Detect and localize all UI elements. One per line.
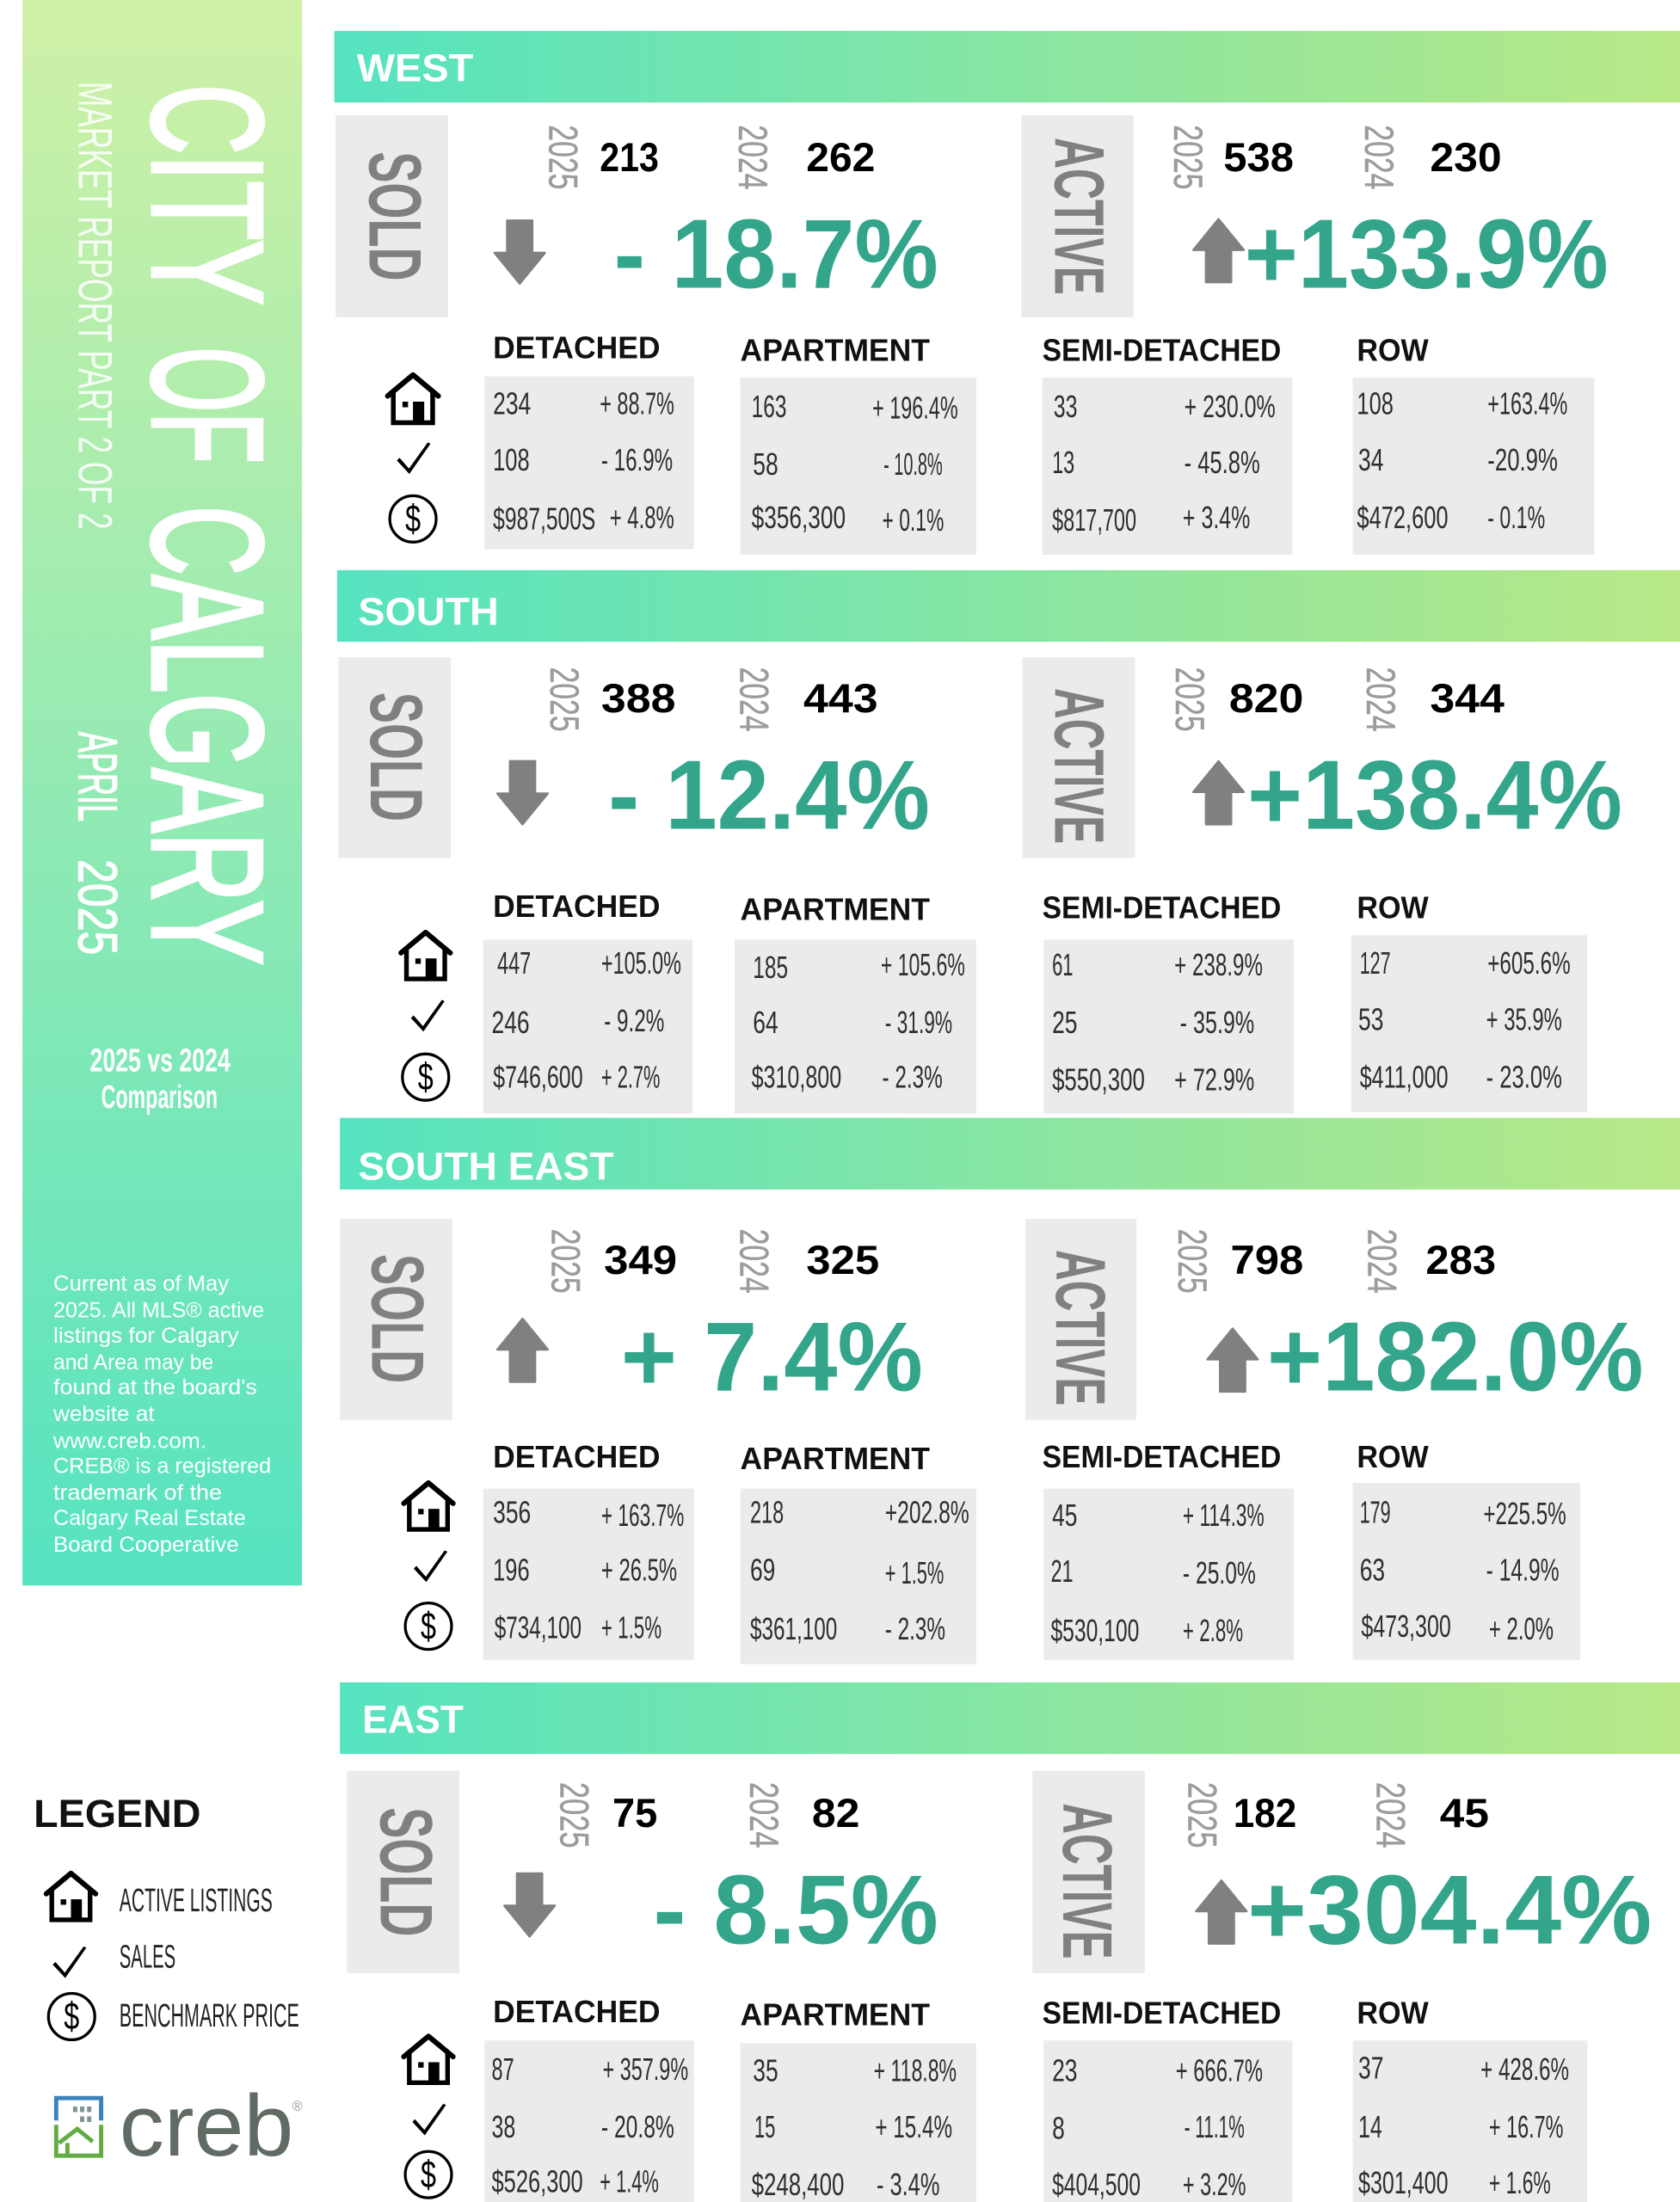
active card — [1032, 1771, 1145, 1973]
table: semi-detached: + 666.7% — [1176, 2053, 1263, 2088]
disclaimer text: CREB® is a registered — [53, 1455, 271, 1479]
sold card — [335, 115, 448, 317]
active card: ACTIVE — [1041, 1250, 1119, 1405]
legend heading: LEGEND — [34, 1792, 201, 1836]
active counts: 182 — [1234, 1791, 1296, 1836]
sold counts: 2025 — [541, 667, 587, 732]
table: semi-detached: SEMI-DETACHED — [1043, 890, 1281, 926]
table: detached — [484, 1994, 694, 2202]
table: detached: 234 — [493, 386, 531, 421]
table: row: - 0.1% — [1487, 500, 1545, 535]
table: detached: - 16.9% — [601, 442, 673, 477]
active card: ACTIVE — [1048, 1803, 1126, 1959]
table: semi-detached: + 114.3% — [1183, 1498, 1265, 1533]
sold change: + 7.4% — [621, 1302, 923, 1412]
table: detached: 356 — [493, 1495, 531, 1530]
table: semi-detached: - 45.8% — [1185, 445, 1260, 480]
table: row — [1353, 333, 1594, 555]
table: detached: DETACHED — [493, 889, 660, 924]
table: detached: $746,600 — [493, 1059, 583, 1094]
table: row: + 1.6% — [1489, 2165, 1551, 2200]
table: semi-detached: 23 — [1052, 2053, 1077, 2088]
logo: creb — [56, 2077, 303, 2174]
table: apartment: + 0.1% — [882, 502, 944, 538]
sold counts: 262 — [806, 135, 875, 181]
arrow: sold down — [497, 761, 548, 824]
table: row: 179 — [1360, 1495, 1391, 1530]
sold change: - 12.4% — [608, 741, 930, 850]
table: apartment: 64 — [753, 1005, 778, 1040]
table: apartment: 35 — [753, 2053, 778, 2088]
table: apartment: APARTMENT — [741, 1441, 930, 1476]
table: row — [1353, 1439, 1580, 1660]
table: row: -20.9% — [1487, 442, 1558, 477]
sold card: SOLD — [354, 692, 437, 821]
table: row: 127 — [1360, 945, 1391, 981]
table: apartment: + 15.4% — [875, 2109, 952, 2144]
comparison label: Comparison — [102, 1079, 218, 1115]
heading bar — [337, 570, 1680, 642]
sold card: SOLD — [353, 151, 435, 281]
heading bar — [340, 1118, 1680, 1190]
disclaimer text: Board Cooperative — [53, 1533, 239, 1557]
table: semi-detached: + 3.2% — [1183, 2167, 1246, 2202]
table: row: + 2.0% — [1489, 1611, 1554, 1646]
table: row: ROW — [1357, 1996, 1429, 2031]
comparison label: 2025 vs 2024 — [90, 1043, 231, 1079]
table: detached: + 357.9% — [603, 2051, 688, 2087]
table: detached: 38 — [492, 2109, 515, 2144]
active counts: 2024 — [1367, 1782, 1412, 1848]
table: semi-detached — [1043, 333, 1292, 555]
table: apartment — [735, 891, 976, 1114]
table: detached: - 9.2% — [604, 1003, 664, 1038]
table: detached: 246 — [492, 1005, 530, 1040]
legend label: benchmark price: BENCHMARK PRICE — [120, 1997, 299, 2033]
active counts — [1169, 1229, 1496, 1294]
title: CITY — [120, 84, 296, 304]
active counts: 2024 — [1358, 1229, 1404, 1294]
table: row: ROW — [1357, 333, 1429, 368]
table: semi-detached: 13 — [1052, 445, 1074, 480]
table: semi-detached: 8 — [1052, 2111, 1065, 2146]
active counts: 798 — [1230, 1238, 1303, 1283]
disclaimer text: Calgary Real Estate — [53, 1506, 246, 1530]
sold counts: 388 — [601, 676, 675, 722]
table: detached: 447 — [497, 945, 531, 981]
row icons: $ — [405, 498, 421, 540]
table: row: - 14.9% — [1486, 1553, 1560, 1588]
table: apartment — [741, 1996, 976, 2202]
table: detached: + 26.5% — [601, 1553, 677, 1588]
table: row: $473,300 — [1361, 1608, 1451, 1644]
sold counts: 2025 — [543, 1229, 588, 1294]
sold counts: 325 — [806, 1238, 879, 1283]
table: semi-detached: - 35.9% — [1180, 1005, 1254, 1040]
logo: creb: creb — [120, 2077, 293, 2174]
disclaimer text: www.creb.com. — [52, 1429, 206, 1453]
table: semi-detached: 21 — [1050, 1553, 1074, 1589]
section: west — [335, 31, 1680, 555]
sold card — [339, 657, 451, 858]
sold card — [340, 1219, 452, 1420]
table: semi-detached: - 25.0% — [1183, 1555, 1256, 1590]
section: south east — [340, 1118, 1680, 1664]
table: apartment: 218 — [750, 1495, 784, 1530]
heading bar — [340, 1682, 1680, 1754]
table: row: $411,000 — [1360, 1059, 1449, 1094]
arrow: active up — [1193, 761, 1244, 824]
row icons: $ — [421, 2154, 436, 2196]
table: semi-detached: 25 — [1052, 1005, 1077, 1040]
legend label: sales: SALES — [120, 1938, 175, 1974]
arrow: active up — [1193, 219, 1244, 282]
sold card — [347, 1771, 459, 1973]
table: apartment: 58 — [753, 446, 778, 482]
table: row — [1353, 1996, 1587, 2202]
sold counts: 2025 — [551, 1782, 597, 1848]
table: semi-detached: + 238.9% — [1174, 947, 1263, 982]
sold change: - 18.7% — [614, 200, 938, 310]
table: apartment: + 118.8% — [874, 2053, 957, 2088]
row icons: $ — [418, 1056, 434, 1098]
active card — [1025, 1219, 1136, 1420]
table: detached: + 1.5% — [601, 1609, 662, 1645]
table: apartment: APARTMENT — [741, 1996, 930, 2032]
sold counts — [541, 667, 878, 732]
table: row: +225.5% — [1483, 1496, 1566, 1531]
table: apartment: 163 — [752, 389, 786, 424]
disclaimer text — [52, 1271, 271, 1557]
icon: house — [46, 1873, 95, 1920]
disclaimer text: and Area may be — [53, 1350, 213, 1375]
table: apartment: - 3.4% — [877, 2167, 939, 2202]
table: detached: 87 — [492, 2051, 514, 2087]
heading bar: WEST — [357, 46, 473, 90]
table: detached — [484, 329, 694, 549]
row icons — [403, 1483, 453, 1650]
comparison label — [90, 1043, 231, 1115]
table: apartment: + 1.5% — [885, 1555, 944, 1590]
table: semi-detached — [1043, 890, 1294, 1114]
table: semi-detached: $530,100 — [1050, 1613, 1139, 1648]
active counts: 2024 — [1357, 667, 1403, 732]
icon: dollar — [48, 1994, 95, 2039]
arrow: sold down — [495, 220, 545, 284]
table: semi-detached — [1043, 1439, 1294, 1660]
table: row: $301,400 — [1358, 2165, 1449, 2200]
row icons: $ — [421, 1605, 436, 1647]
row icons — [403, 2036, 453, 2198]
active counts — [1165, 125, 1502, 189]
disclaimer text: 2025. All MLS® active — [53, 1298, 264, 1322]
active counts — [1166, 667, 1505, 732]
table: row: 53 — [1358, 1002, 1383, 1037]
logo: creb: ® — [292, 2099, 303, 2114]
active counts: 2025 — [1165, 125, 1210, 189]
sold card: SOLD — [365, 1807, 447, 1936]
table: row: + 16.7% — [1489, 2109, 1563, 2144]
table: detached: + 88.7% — [600, 386, 674, 421]
table: detached: $526,300 — [492, 2164, 583, 2199]
table: apartment: - 2.3% — [882, 1059, 943, 1094]
table: detached — [483, 889, 692, 1114]
table: row: 14 — [1358, 2109, 1382, 2144]
table: detached: - 20.8% — [601, 2109, 674, 2144]
table: semi-detached: $404,500 — [1052, 2167, 1141, 2202]
table: detached: + 2.7% — [601, 1059, 660, 1094]
table: row: 63 — [1360, 1553, 1385, 1588]
active card: ACTIVE — [1039, 138, 1117, 295]
sold counts — [543, 1229, 879, 1294]
table: semi-detached: + 230.0% — [1185, 389, 1276, 424]
active counts: 283 — [1425, 1238, 1496, 1283]
table: row — [1351, 890, 1587, 1112]
arrow: sold up — [497, 1319, 548, 1382]
heading bar: SOUTH — [358, 590, 499, 634]
table: detached: + 1.4% — [600, 2164, 659, 2199]
table: detached: 196 — [493, 1553, 530, 1588]
sold counts: 2024 — [741, 1782, 786, 1848]
sold counts: 2025 — [539, 125, 585, 189]
table: row: 34 — [1358, 442, 1383, 477]
heading bar — [335, 31, 1680, 102]
table: semi-detached: 33 — [1054, 389, 1077, 424]
disclaimer text: listings for Calgary — [53, 1324, 239, 1348]
table: semi-detached: + 3.4% — [1183, 500, 1250, 535]
report date: APRIL — [66, 732, 127, 821]
active card — [1021, 115, 1134, 317]
table: apartment: + 196.4% — [872, 391, 958, 426]
section: south — [337, 570, 1680, 1114]
table: apartment — [741, 1441, 976, 1664]
table: apartment: APARTMENT — [741, 333, 930, 368]
active change: +138.4% — [1247, 741, 1622, 850]
panel: legend — [34, 1792, 299, 2039]
table: semi-detached: + 72.9% — [1174, 1062, 1254, 1098]
table: apartment: $361,100 — [750, 1611, 837, 1646]
active counts: 344 — [1430, 676, 1505, 722]
table: detached: DETACHED — [493, 1439, 660, 1474]
row icons — [401, 932, 450, 1100]
sold counts — [539, 125, 875, 189]
table: semi-detached: $817,700 — [1052, 502, 1136, 538]
table: detached: DETACHED — [493, 1994, 660, 2029]
heading bar: EAST — [362, 1698, 464, 1742]
icon: check — [52, 1947, 86, 1978]
table: apartment: - 2.3% — [885, 1611, 945, 1646]
active card — [1023, 657, 1135, 858]
sold card: SOLD — [356, 1254, 439, 1383]
table: semi-detached: 61 — [1052, 947, 1074, 982]
disclaimer text: Current as of May — [53, 1271, 230, 1295]
table: semi-detached: SEMI-DETACHED — [1043, 333, 1281, 368]
active change: +182.0% — [1267, 1302, 1644, 1412]
table: apartment: $310,800 — [752, 1059, 841, 1094]
table: apartment: $248,400 — [752, 2167, 844, 2202]
table: semi-detached: SEMI-DETACHED — [1043, 1439, 1281, 1474]
table: apartment — [741, 333, 976, 555]
active card: ACTIVE — [1039, 688, 1117, 844]
arrow: active up — [1196, 1880, 1246, 1944]
sold counts: 2024 — [731, 667, 777, 732]
active counts: 45 — [1440, 1791, 1489, 1836]
title: CALGARY — [120, 506, 296, 965]
table: row: - 23.0% — [1486, 1059, 1562, 1094]
active counts: 2025 — [1178, 1782, 1224, 1848]
active change: +304.4% — [1247, 1856, 1652, 1965]
heading bar: SOUTH EAST — [358, 1144, 614, 1188]
title: OF — [120, 347, 296, 464]
table: detached: $987,500S — [493, 501, 595, 537]
table: semi-detached: $550,300 — [1052, 1062, 1145, 1098]
table: detached: DETACHED — [493, 329, 660, 365]
arrow: sold down — [504, 1873, 555, 1936]
table: semi-detached — [1043, 1996, 1292, 2202]
sold counts: 82 — [812, 1791, 859, 1836]
table: detached: + 163.7% — [601, 1498, 684, 1533]
title — [120, 84, 296, 965]
legend label: active listings: ACTIVE LISTINGS — [120, 1882, 273, 1918]
icon: dollar: $ — [64, 1996, 79, 2038]
subtitle: MARKET REPORT PART 2 OF 2 — [68, 82, 121, 530]
active counts: 820 — [1229, 676, 1303, 722]
table: detached: $734,100 — [495, 1609, 582, 1645]
sold counts — [551, 1782, 859, 1848]
arrow: active up — [1208, 1328, 1258, 1392]
sold counts: 75 — [612, 1791, 657, 1836]
sold counts: 443 — [803, 676, 878, 722]
table: semi-detached: - 11.1% — [1185, 2109, 1245, 2144]
table: row: ROW — [1357, 890, 1429, 926]
table: apartment: 15 — [754, 2109, 775, 2144]
active counts: 2025 — [1169, 1229, 1215, 1294]
table: apartment: + 105.6% — [881, 947, 965, 982]
table: detached: 108 — [493, 442, 530, 477]
table: row: +163.4% — [1487, 386, 1567, 421]
active change: +133.9% — [1245, 200, 1609, 310]
report date: 2025 — [66, 859, 127, 955]
sold counts: 2024 — [731, 1229, 777, 1294]
table: detached: + 4.8% — [610, 500, 674, 535]
table: detached: +105.0% — [601, 945, 681, 981]
table: apartment: - 31.9% — [885, 1005, 952, 1040]
section: east — [340, 1682, 1680, 2202]
table: semi-detached: 45 — [1052, 1498, 1077, 1533]
table: apartment: 69 — [750, 1553, 775, 1588]
table: row: ROW — [1357, 1439, 1429, 1474]
table: apartment: - 10.8% — [883, 446, 943, 482]
disclaimer text: found at the board's — [53, 1375, 257, 1399]
panel: sidebar — [22, 0, 302, 1585]
row icons — [388, 375, 438, 542]
table: apartment: APARTMENT — [741, 891, 930, 926]
table: row: + 428.6% — [1480, 2051, 1569, 2087]
active counts: 2025 — [1166, 667, 1212, 732]
table: apartment: +202.8% — [885, 1495, 969, 1530]
sold counts: 349 — [604, 1238, 677, 1283]
table: row: + 35.9% — [1486, 1002, 1562, 1037]
table: row: $472,600 — [1357, 500, 1449, 535]
active counts: 2024 — [1356, 125, 1401, 189]
disclaimer text: trademark of the — [53, 1481, 222, 1505]
table: semi-detached: + 2.8% — [1183, 1613, 1243, 1648]
table: row: +605.6% — [1487, 945, 1571, 981]
table: apartment: 185 — [753, 950, 788, 985]
table: row: 37 — [1358, 2050, 1383, 2085]
disclaimer text: website at — [52, 1402, 155, 1426]
table: detached — [483, 1439, 694, 1660]
sold counts: 213 — [600, 135, 659, 181]
table: semi-detached: SEMI-DETACHED — [1043, 1996, 1281, 2031]
active counts: 230 — [1430, 135, 1502, 181]
active counts — [1178, 1782, 1489, 1848]
table: row: 108 — [1357, 386, 1394, 421]
table: apartment: $356,300 — [752, 500, 846, 535]
active counts: 538 — [1223, 135, 1294, 181]
sold change: - 8.5% — [653, 1856, 938, 1965]
sold counts: 2024 — [729, 125, 775, 189]
